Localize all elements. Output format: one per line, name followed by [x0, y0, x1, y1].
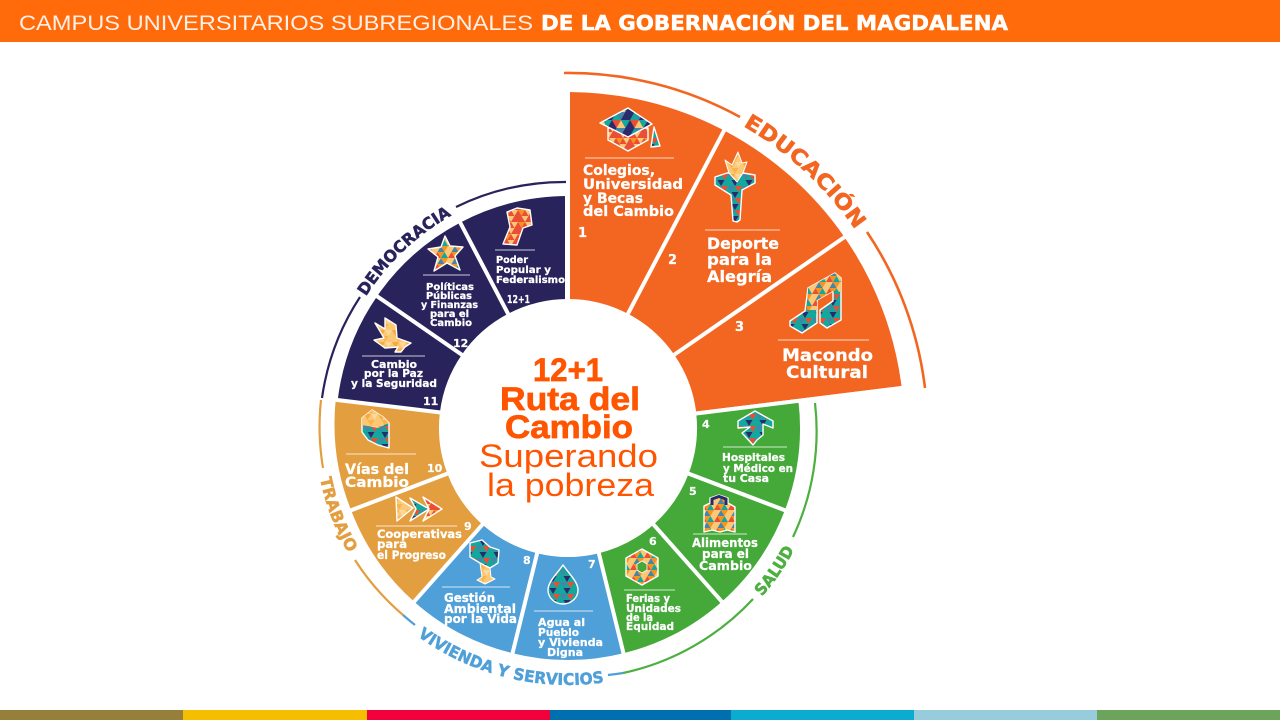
arc and label: educacion: EDUCACIÓN [744, 114, 867, 228]
panel: segment 6 ferias: Ferias y [626, 593, 670, 605]
panel: segment 7 agua: y Vivienda [538, 636, 603, 649]
panel: segment 1 colegios: 1 [578, 226, 587, 241]
center title: Cambio [505, 409, 633, 445]
panel: segment 5 alimentos [654, 474, 785, 602]
panel: segment 6 ferias: de la [626, 612, 653, 624]
panel: segment 3 macondo: Cultural [786, 363, 868, 383]
panel: segment 5 alimentos: Cambio [699, 558, 752, 573]
footer color stripe [0, 710, 1280, 720]
panel: segment 1 colegios: del Cambio [583, 204, 674, 220]
panel: segment 4 hospitales: 4 [702, 418, 710, 431]
center title: Superando [479, 438, 658, 474]
panel: segment 5 alimentos: Alimentos [692, 535, 758, 550]
panel: segment 1 colegios: Universidad [583, 177, 683, 193]
panel: segment 8 gestion ambiental: Ambiental [444, 602, 516, 616]
panel: segment 4 hospitales: tu Casa [723, 472, 769, 485]
panel: segment 6 ferias: Unidades [626, 603, 681, 615]
arc and label: educacion [564, 72, 926, 388]
panel: segment 2 deporte [628, 130, 844, 355]
panel: segment 1 colegios: y Becas [583, 191, 643, 207]
panel: segment 5 alimentos: para el [702, 546, 749, 561]
panel: segment 11 cambio por la paz: 11 [423, 395, 438, 408]
panel: segment 12+1 poder popular: Popular y [496, 265, 551, 276]
panel: segment 11 cambio por la paz [338, 296, 462, 412]
panel: segment 11 cambio por la paz: por la Paz [364, 367, 423, 380]
panel: segment 5 alimentos: 5 [689, 485, 697, 498]
panel: segment 11 cambio por la paz: y la Seguridad [351, 377, 437, 390]
panel: segment 12 politicas publicas [377, 223, 508, 355]
arc and label: vivienda y servicios: VIVIENDA Y SERVICIOS [420, 626, 603, 686]
panel: segment 10 vias [334, 400, 447, 510]
panel: segment 8 gestion ambiental: Gestión [444, 591, 495, 605]
panel: segment 9 cooperativas: el Progreso [377, 548, 446, 562]
panel: segment 6 ferias: 6 [649, 535, 657, 548]
arc and label: salud: SALUD [754, 546, 792, 596]
panel: segment 9 cooperativas: Cooperativas [377, 527, 462, 541]
arc and label: salud [622, 402, 818, 674]
panel: segment 4 hospitales: Hospitales [722, 451, 785, 464]
center title: la pobreza [487, 467, 654, 503]
panel: segment 10 vias: Vías del [345, 462, 409, 478]
panel: segment 10 vias: Cambio [345, 475, 409, 491]
panel: segment 8 gestion ambiental: por la Vida [444, 612, 517, 626]
panel: segment 4 hospitales [689, 400, 800, 510]
panel: segment 1 colegios [568, 92, 724, 314]
panel: segment 8 gestion ambiental [414, 525, 537, 653]
panel: segment 9 cooperativas [351, 474, 482, 602]
panel: segment 12+1 poder popular: 12+1 [507, 293, 530, 306]
panel: segment 12+1 poder popular: Federalismo [496, 275, 565, 286]
panel: segment 9 cooperativas: 9 [464, 520, 472, 533]
panel: segment 12 politicas publicas: para el [430, 309, 469, 320]
panel: segment 9 cooperativas: para [377, 537, 407, 551]
center title: 12+1 [533, 352, 603, 388]
panel: segment 12 politicas publicas: 12 [453, 337, 468, 350]
panel: segment 7 agua: 7 [588, 558, 596, 571]
panel: segment 12+1 poder popular: Poder [496, 255, 528, 266]
panel: segment 6 ferias: Equidad [626, 621, 674, 633]
panel: segment 3 macondo: Macondo [782, 346, 873, 366]
panel: segment 12 politicas publicas: Públicas [426, 290, 472, 302]
panel: segment 2 deporte: para la [707, 250, 772, 269]
panel: segment 11 cambio por la paz: Cambio [371, 358, 417, 371]
header band: CAMPUS UNIVERSITARIOS SUBREGIONALES [19, 12, 533, 35]
arc and label: trabajo [318, 400, 404, 616]
panel: segment 12 politicas publicas: Cambio [430, 318, 472, 329]
panel: segment 2 deporte: 2 [668, 253, 677, 268]
panel: segment 7 agua: Pueblo [538, 626, 579, 639]
arc and label: trabajo: TRABAJO [320, 476, 357, 551]
panel: segment 7 agua: Digna [547, 646, 583, 659]
header band: DE LA GOBERNACIÓN DEL MAGDALENA [541, 11, 1009, 35]
header band [0, 0, 1280, 42]
panel: segment 1 colegios: Colegios, [583, 163, 655, 179]
panel: segment 2 deporte: Deporte [707, 234, 779, 253]
panel: segment 12 politicas publicas: y Finanzas [421, 300, 478, 311]
panel: segment 4 hospitales: y Médico en [723, 462, 793, 475]
arc and label: democracia [320, 180, 566, 398]
center title: Ruta del [500, 381, 640, 417]
panel: segment 7 agua [512, 553, 624, 660]
panel: segment 3 macondo [674, 237, 902, 412]
panel: segment 6 ferias [599, 525, 722, 653]
panel: segment 2 deporte: Alegría [707, 267, 772, 286]
panel: segment 12 politicas publicas: Políticas [426, 281, 474, 293]
panel: segment 10 vias: 10 [427, 462, 443, 475]
arc and label: democracia: DEMOCRACIA [356, 207, 452, 296]
center title [479, 352, 658, 503]
panel: segment 3 macondo: 3 [735, 320, 744, 335]
panel: segment 7 agua: Agua al [538, 616, 585, 629]
panel: segment 8 gestion ambiental: 8 [523, 554, 531, 567]
panel: segment 12+1 poder popular [460, 196, 568, 314]
